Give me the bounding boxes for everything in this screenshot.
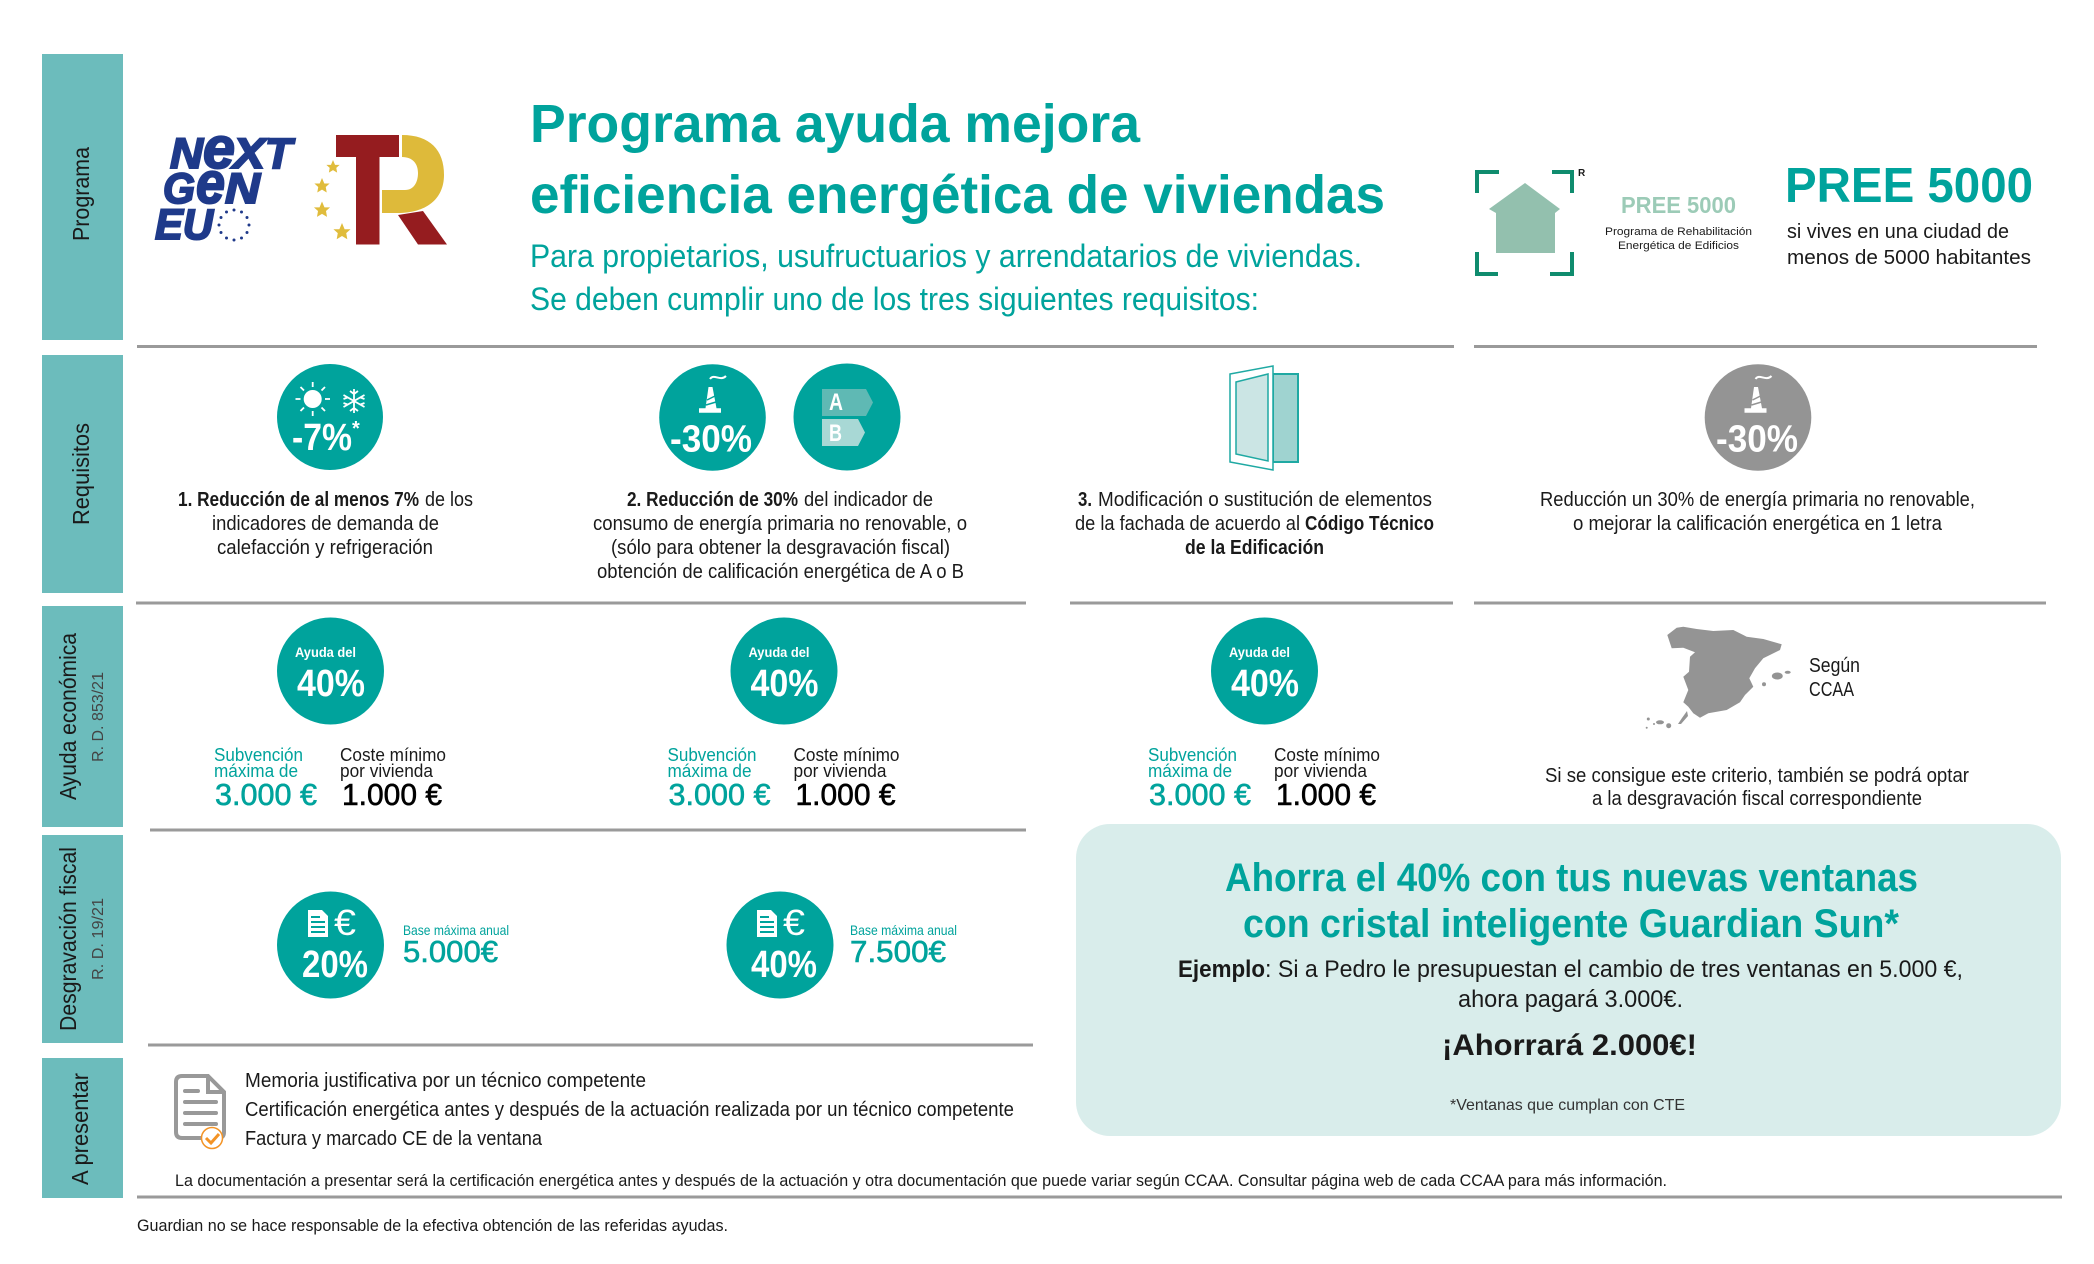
subvención máxima: máxima de xyxy=(668,761,752,781)
base máxima 7.500€: 7.500€ xyxy=(850,934,946,969)
desgravación badge 20% xyxy=(277,892,384,998)
text: documentos a presentar: Factura y marcado CE de la ventana xyxy=(245,1128,543,1150)
logo: NextGenerationEU: X xyxy=(231,130,268,178)
logo: PREE 5000 house: Programa de Rehabilitación xyxy=(1605,226,1752,238)
sidebar: Programa xyxy=(42,54,123,340)
logo: PREE 5000 house xyxy=(1477,168,1752,274)
logo: NextGenerationEU: e xyxy=(203,116,235,181)
base máxima 5.000€: 5.000€ xyxy=(403,934,498,969)
icon: energy labels A B xyxy=(794,364,900,470)
heading: PREE 5000: PREE 5000 xyxy=(1785,159,2033,213)
subvención máxima: 3.000 € xyxy=(215,777,317,812)
logo: PREE 5000 house: Energética de Edificios xyxy=(1618,240,1740,252)
base máxima 7.500€ xyxy=(850,922,957,969)
logo: NextGenerationEU: N xyxy=(170,130,204,178)
text: requisito 3: de la fachada de acuerdo al xyxy=(1075,513,1300,535)
coste mínimo: por vivienda xyxy=(340,761,434,781)
coste mínimo: 1.000 € xyxy=(342,777,442,812)
badge: ayuda 40%: Ayuda del xyxy=(295,644,356,660)
sidebar: Requisitos xyxy=(42,355,123,593)
callout: ahorro ventanas: ¡Ahorrará 2.000€! xyxy=(1442,1029,1697,1062)
sidebar: Desgravación fiscal: Desgravación fiscal xyxy=(55,847,81,1031)
icon: factory -30% xyxy=(659,364,766,471)
base máxima 7.500€: Base máxima anual xyxy=(850,922,957,938)
sidebar: Ayuda económica: Ayuda económica xyxy=(55,633,81,800)
callout: ahorro ventanas: ahora pagará 3.000€. xyxy=(1458,986,1683,1013)
coste mínimo xyxy=(794,745,900,812)
subvención máxima: 3.000 € xyxy=(1149,777,1251,812)
text: PREE 5000 description: si vives en una ciudad de xyxy=(1787,221,2009,243)
base máxima 5.000€ xyxy=(403,922,509,969)
coste mínimo: Coste mínimo xyxy=(1274,745,1380,765)
sidebar: Desgravación fiscal xyxy=(42,835,123,1043)
badge: ayuda 40% xyxy=(1211,618,1318,724)
text: PREE 5000 description: menos de 5000 habitantes xyxy=(1787,247,2031,269)
text: requisito 2: del indicador de xyxy=(804,489,933,511)
text: criterio fiscal: a la desgravación fiscal correspondiente xyxy=(1592,788,1922,810)
title xyxy=(530,94,1385,225)
coste mínimo: por vivienda xyxy=(794,761,887,781)
label: Según CCAA xyxy=(1809,655,1860,701)
text: requisito PREE 5000: o mejorar la calificación energética en 1 letra xyxy=(1573,513,1943,535)
subvención máxima: máxima de xyxy=(1148,761,1232,781)
text: requisito 3: 3. xyxy=(1078,489,1092,511)
text: documentos a presentar: Memoria justificativa por un técnico competente xyxy=(245,1070,646,1092)
logo: NextGenerationEU: N xyxy=(225,165,261,213)
logo: NextGenerationEU: EU xyxy=(155,201,214,249)
logo: NextGenerationEU: G xyxy=(163,165,195,213)
badge: ayuda 40%: Ayuda del xyxy=(1229,644,1290,660)
text: requisito 1 xyxy=(178,489,473,559)
text: PREE 5000 description xyxy=(1787,221,2031,269)
coste mínimo: por vivienda xyxy=(1274,761,1368,781)
note: documentación: La documentación a presentar será la certificación energética antes y después de la actuación y otra documentación que puede variar según CCAA. Consultar página web de cada CCAA para más información. xyxy=(175,1171,1667,1190)
text: requisito 3: de la Edificación xyxy=(1185,537,1324,559)
text: requisito 1: indicadores de demanda de xyxy=(212,513,439,535)
text: requisito PREE 5000: Reducción un 30% de energía primaria no renovable, xyxy=(1540,489,1975,511)
logo: NextGenerationEU: T xyxy=(265,130,296,178)
badge: ayuda 40%: 40% xyxy=(1231,663,1299,705)
title: Programa ayuda mejora xyxy=(530,94,1141,154)
desgravación badge 40%: € xyxy=(783,902,805,943)
text: documentos a presentar xyxy=(245,1070,1014,1150)
coste mínimo: Coste mínimo xyxy=(794,745,900,765)
label: Según CCAA: Según xyxy=(1809,655,1860,677)
icon: document xyxy=(308,910,328,937)
icon: document with check xyxy=(176,1076,224,1148)
coste mínimo: 1.000 € xyxy=(796,777,896,812)
text: requisito 2: 2. Reducción de 30% xyxy=(627,489,798,511)
icon: grey factory -30% xyxy=(1705,364,1811,471)
base máxima 5.000€: Base máxima anual xyxy=(403,922,509,938)
text: criterio fiscal: Si se consigue este criterio, también se podrá optar xyxy=(1545,765,1969,787)
icon: grey factory -30%: -30% xyxy=(1716,418,1798,460)
subvención máxima xyxy=(214,745,317,812)
coste mínimo: 1.000 € xyxy=(1276,777,1376,812)
desgravación badge 20%: 20% xyxy=(302,944,368,986)
subvención máxima: 3.000 € xyxy=(668,777,770,812)
text: requisito 1: 1. Reducción de al menos 7% xyxy=(178,489,419,511)
label: Según CCAA: CCAA xyxy=(1809,679,1855,701)
subtitle xyxy=(530,238,1362,317)
text: requisito 2: consumo de energía primaria no renovable, o xyxy=(593,513,967,535)
callout: ahorro ventanas: : Si a Pedro le presupuestan el cambio de tres ventanas en 5.000 €, xyxy=(1265,956,1963,983)
badge: ayuda 40% xyxy=(730,618,838,724)
subvención máxima: Subvención xyxy=(214,745,303,765)
callout: ahorro ventanas: Ejemplo xyxy=(1178,956,1265,983)
text: criterio fiscal xyxy=(1545,765,1969,810)
text: requisito 2 xyxy=(593,489,967,583)
logo: PREE 5000 house: PREE 5000 xyxy=(1621,192,1736,218)
map: Spain xyxy=(1646,627,1791,729)
icon: energy labels A B: A xyxy=(829,389,843,416)
subvención máxima: Subvención xyxy=(668,745,756,765)
sidebar: Programa: Programa xyxy=(68,147,94,241)
sidebar: Requisitos: Requisitos xyxy=(68,423,94,525)
sidebar: Ayuda económica: R. D. 853/21 xyxy=(90,672,107,762)
icon: sun snowflake -7%: -7% xyxy=(292,417,352,459)
icon: sun snowflake -7%: * xyxy=(352,418,360,440)
disclaimer: Guardian no se hace responsable de la efectiva obtención de las referidas ayudas. xyxy=(137,1216,728,1235)
sidebar: Ayuda económica xyxy=(42,606,123,827)
icon: sun snowflake -7% xyxy=(277,364,383,470)
text: requisito 1: calefacción y refrigeración xyxy=(217,537,433,559)
subvención máxima xyxy=(1148,745,1251,812)
badge: ayuda 40%: Ayuda del xyxy=(748,644,810,660)
logo: Plan de Recuperación TR xyxy=(314,135,447,244)
ayuda column 1 xyxy=(214,618,446,812)
logo: PREE 5000 house: R xyxy=(1578,168,1586,179)
text: requisito 3: Código Técnico xyxy=(1305,513,1434,535)
subvención máxima: Subvención xyxy=(1148,745,1237,765)
coste mínimo xyxy=(1274,745,1380,812)
text: requisito 2: (sólo para obtener la desgravación fiscal) xyxy=(611,537,950,559)
text: documentos a presentar: Certificación energética antes y después de la actuación realizada por un técnico competente xyxy=(245,1099,1014,1121)
callout: ahorro ventanas xyxy=(1076,824,2061,1136)
sidebar: Desgravación fiscal: R. D. 19/21 xyxy=(90,898,107,980)
badge: ayuda 40% xyxy=(277,618,384,724)
text: requisito PREE 5000 xyxy=(1540,489,1975,535)
icon: energy labels A B: B xyxy=(829,420,842,447)
desgravación badge 20%: € xyxy=(334,902,356,943)
ayuda column 3 xyxy=(1148,618,1380,812)
callout: ahorro ventanas: con cristal inteligente Guardian Sun* xyxy=(1243,902,1899,946)
sidebar: A presentar xyxy=(42,1058,123,1198)
text: requisito 3: Modificación o sustitución de elementos xyxy=(1098,489,1432,511)
logo: NextGenerationEU: e xyxy=(196,151,225,216)
text: requisito 3 xyxy=(1075,489,1434,559)
subtitle: Se deben cumplir uno de los tres siguientes requisitos: xyxy=(530,281,1259,317)
icon: window xyxy=(1230,366,1298,470)
subtitle: Para propietarios, usufructuarios y arrendatarios de viviendas. xyxy=(530,238,1362,274)
coste mínimo xyxy=(340,745,446,812)
title: eficiencia energética de viviendas xyxy=(530,165,1385,225)
desgravación badge 40% xyxy=(726,892,834,998)
ayuda column 2 xyxy=(668,618,900,812)
icon: factory -30%: -30% xyxy=(670,418,752,460)
icon: document xyxy=(757,910,777,937)
coste mínimo: Coste mínimo xyxy=(340,745,446,765)
subvención máxima: máxima de xyxy=(214,761,298,781)
badge: ayuda 40%: 40% xyxy=(297,663,365,705)
logo: NextGenerationEU xyxy=(155,116,296,249)
text: requisito 1: de los xyxy=(425,489,473,511)
callout: ahorro ventanas: Ahorra el 40% con tus nuevas ventanas xyxy=(1225,856,1918,900)
badge: ayuda 40%: 40% xyxy=(750,663,818,705)
desgravación badge 40%: 40% xyxy=(751,944,817,986)
callout: ahorro ventanas: *Ventanas que cumplan con CTE xyxy=(1450,1097,1685,1114)
subvención máxima xyxy=(668,745,770,812)
sidebar: A presentar: A presentar xyxy=(67,1073,93,1185)
text: requisito 2: obtención de calificación energética de A o B xyxy=(597,561,964,583)
